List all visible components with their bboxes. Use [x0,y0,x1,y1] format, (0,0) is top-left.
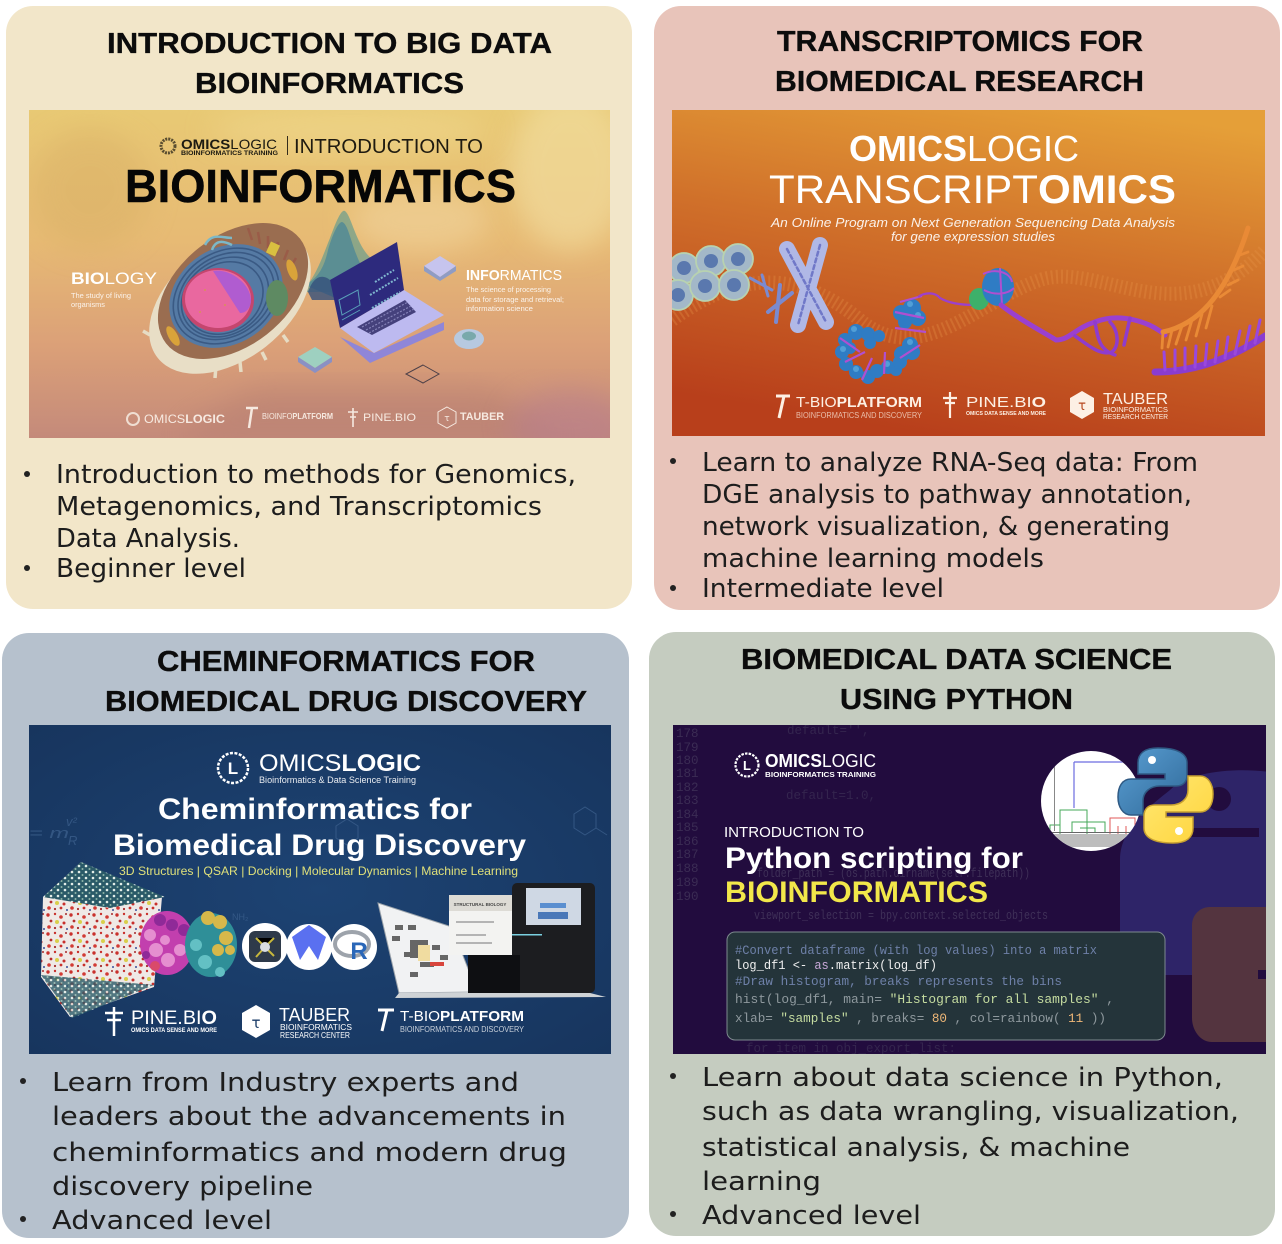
partner logos: TAUBER [1103,391,1168,408]
banner heading [113,793,526,862]
logo: OmicsLogic: L [228,759,238,778]
faint code background: 189 [676,876,699,890]
faint code background: 184 [676,808,699,822]
logo: OmicsLogic: INTRODUCTION TO [294,136,483,158]
title: Cheminformatics for Biomedical Drug Discovery: BIOMEDICAL DRUG DISCOVERY [105,686,587,718]
panel: Introduction to Big Data Bioinformatics [6,6,632,609]
partner logos: τ [1078,399,1086,414]
panel: Transcriptomics for Biomedical Research [654,6,1280,610]
faint code background: 182 [676,781,699,795]
illustration: chromosomes [750,245,826,325]
partner logos: τ [251,1014,261,1032]
faint code background: 190 [676,890,699,904]
faint code background: 186 [676,835,699,849]
banner heading: BIOINFORMATICS [725,876,988,909]
panel: Cheminformatics for Biomedical Drug Discovery [2,633,629,1238]
partner logos: τ [444,414,450,424]
bullet list [670,1063,1239,1231]
partner logos: T-BIOPLATFORM [400,1008,524,1025]
faint code background: for item in obj_export_list: [746,1042,956,1056]
faint formula background: NH₂ [232,912,249,922]
title: Biomedical Data Science using Python: BIOMEDICAL DATA SCIENCE [741,644,1172,676]
title: Cheminformatics for Biomedical Drug Discovery: CHEMINFORMATICS FOR [157,646,535,678]
banner heading: TRANSCRIPT OMICS [769,168,1176,212]
label: Informatics [466,270,564,311]
banner heading: BIOINFORMATICS [125,160,516,212]
bullet list: Metagenomics, and Transcriptomics [56,492,542,522]
title: Transcriptomics for Biomedical Research [775,26,1144,98]
code box: log_df1 <- as.matrix(log_df) [735,959,937,973]
title: Introduction to Big Data Bioinformatics [107,28,552,100]
partner logos [127,407,504,428]
bullet list: machine learning models [702,544,1044,574]
bullet list [670,448,1198,604]
banner heading [725,827,1022,902]
label: Informatics: data for storage and retrieval; [466,295,564,304]
partner logos: RESEARCH CENTER [280,1031,350,1040]
course banner: OmicsLogic Transcriptomics [663,110,1265,436]
partner logos: TAUBER [279,1004,350,1025]
icons: software tools [242,923,377,970]
illustration: animal cell [142,223,311,378]
logo: OmicsLogic: Bioinformatics & Data Science Training [259,775,416,785]
label: Biology: BIOLOGY [71,269,157,288]
faint code background: default='', [787,724,870,738]
logo: OmicsLogic: OMICSLOGIC [181,136,277,152]
illustration: proteins [140,911,237,977]
bullet list: network visualization, & generating [702,512,1170,542]
banner heading: OMICSLOGIC [849,128,1079,169]
banner heading: Biomedical Drug Discovery [113,829,526,862]
illustration: data peak chart [307,210,370,300]
logo: OmicsLogic: OMICSLOGIC [765,751,876,771]
bullet list: Learn from Industry experts and [52,1068,519,1098]
illustration: laptop and sequencer [378,883,606,998]
logo: OmicsLogic [160,136,482,155]
faint code background: 187 [676,848,699,862]
label: Biology: The study of living [71,291,131,300]
illustration: RNA strands [1001,228,1265,372]
title: Cheminformatics for Biomedical Drug Discovery [105,646,587,718]
logo: OmicsLogic: OMICSLOGIC [259,750,421,777]
bullet list: Advanced level [52,1206,272,1236]
illustration: floating tiles [298,256,484,383]
bullet list: Advanced level [702,1201,921,1231]
partner logos: BIOINFORMATICS [280,1023,352,1032]
bullet list: Introduction to methods for Genomics, [56,460,576,490]
illustration: molecular crystal [41,862,165,1018]
faint code background: viewport_selection = bpy.context.selected_objects [754,909,1048,923]
bullet list: Learn to analyze RNA-Seq data: From [702,448,1198,478]
bullet list: Data Analysis. [56,524,240,554]
partner logos: RESEARCH CENTER [1103,414,1168,421]
partner logos: BIOINFORMATICS [1103,407,1168,414]
course banner: Cheminformatics [29,725,611,1054]
title: Introduction to Big Data Bioinformatics: INTRODUCTION TO BIG DATA [107,28,552,60]
partner logos: BIOINFOPLATFORM [262,411,333,421]
partner logos: OMICS DATA SENSE AND MORE [966,411,1046,417]
banner heading: INTRODUCTION TO [724,824,864,841]
icon: Python logo [1118,748,1213,843]
faint code background: 178 [676,727,699,741]
title: Biomedical Data Science using Python: USING PYTHON [840,684,1073,716]
bullet list: statistical analysis, & machine [702,1133,1130,1163]
faint code background: folder_path = (os.path.dirname(self.filepath)) [757,867,1030,881]
banner heading: An Online Program on Next Generation Sequencing Data Analysis [770,215,1176,230]
label: Biology: organisms [71,300,105,309]
faint formula background: R [68,833,77,848]
bullet list: Beginner level [56,554,246,584]
partner logos: PINE.BIO [363,412,416,424]
dendrogram circle [1041,751,1141,851]
label: Biology [71,272,156,308]
partner logos: OMICS DATA SENSE AND MORE [131,1028,217,1034]
partner logos: BIOINFORMATICS AND DISCOVERY [400,1025,525,1034]
partner logos: OMICSLOGIC [144,412,225,426]
faint formula background: v² [66,814,78,829]
title: Transcriptomics for Biomedical Research: TRANSCRIPTOMICS FOR [777,26,1143,58]
bullet list: leaders about the advancements in [52,1102,566,1132]
illustration: laptop [330,242,444,363]
logo: OmicsLogic: L [743,758,751,773]
label: Informatics: information science [466,304,533,313]
bullet list: cheminformatics and modern drug [52,1138,567,1168]
icons: software tools: R [350,938,368,965]
code box: #Convert dataframe (with log values) into a matrix [735,944,1097,958]
logo: OmicsLogic [218,750,421,785]
faint code background: 180 [676,754,699,768]
illustration: cells [663,244,753,310]
faint code background: default=1.0, [786,789,876,803]
bullet list [20,1068,567,1236]
bullet list: learning [702,1167,821,1197]
partner logos [105,1004,525,1040]
partner logos: T-BIOPLATFORM [796,395,922,411]
illustration: nucleosome and RNA polymerase [969,268,1014,310]
title: Introduction to Big Data Bioinformatics: BIOINFORMATICS [195,68,464,100]
bullet list: DGE analysis to pathway annotation, [702,480,1192,510]
faint code background: 188 [676,862,699,876]
partner logos: TAUBER [460,411,504,423]
label: Informatics: The science of processing [466,285,551,294]
faint code background: 181 [676,767,699,781]
logo: OmicsLogic [736,751,876,779]
course banner: Introduction to Bioinformatics [29,110,610,438]
label: Informatics: INFORMATICS [466,267,562,284]
code box [727,932,1165,1040]
panel: Biomedical Data Science using Python [649,632,1275,1236]
banner heading [769,128,1176,244]
logo: OmicsLogic: BIOINFORMATICS TRAINING [765,770,876,779]
code box: xlab= "samples" , breaks= 80 , col=rainbow( 11 )) [735,1012,1106,1026]
code box: hist(log_df1, main= "Histogram for all samples" , [735,993,1114,1007]
faint formula background [29,807,607,922]
background python mark [1120,770,1270,1042]
faint code background: 183 [676,794,699,808]
code box: #Draw histogram, breaks represents the bins [735,975,1062,989]
partner logos [776,391,1168,421]
bullet list: Learn about data science in Python, [702,1063,1223,1093]
bullet list: Intermediate level [702,574,944,604]
partner logos: PINE.BIO [131,1008,217,1029]
course banner: Python scripting [673,724,1270,1056]
faint code background: 179 [676,741,699,755]
title: Biomedical Data Science using Python [741,644,1172,716]
bullet list: discovery pipeline [52,1172,313,1202]
illustration: laptop and sequencer: STRUCTURAL BIOLOGY [454,902,506,907]
faint code background [676,724,1048,1056]
faint formula background: = m [29,825,69,842]
faint code background: 185 [676,821,699,835]
partner logos: BIOINFORMATICS AND DISCOVERY [796,411,923,420]
banner heading: Cheminformatics for [158,793,472,826]
banner heading: for gene expression studies [891,229,1056,244]
illustration: chromatin [835,293,975,384]
topic list: 3D Structures | QSAR | Docking | Molecular Dynamics | Machine Learning [119,864,518,878]
logo: OmicsLogic: BIOINFORMATICS TRAINING [181,151,278,157]
banner heading: Python scripting for [725,842,1023,875]
title: Transcriptomics for Biomedical Research: BIOMEDICAL RESEARCH [775,66,1144,98]
bullet list [24,460,576,584]
bullet list: such as data wrangling, visualization, [702,1097,1239,1127]
partner logos: PINE.BI O [966,394,1046,411]
